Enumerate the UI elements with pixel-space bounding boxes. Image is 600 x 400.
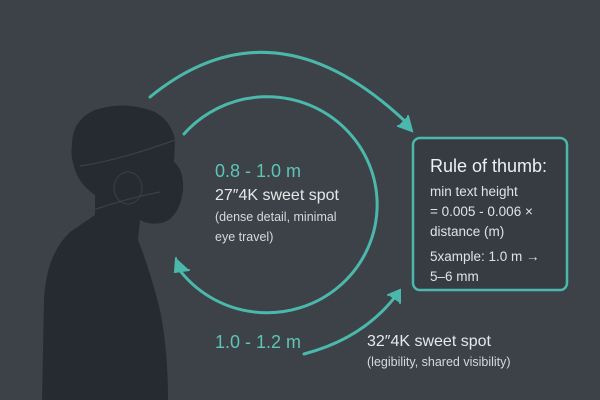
panel: rule of thumb: Rule of thumb: bbox=[430, 156, 547, 176]
panel: rule of thumb: 5xample: 1.0 m → bbox=[430, 249, 540, 264]
text: far range label: 1.0 - 1.2 m bbox=[215, 332, 301, 352]
text: 32 inch description: (legibility, shared visibility) bbox=[367, 355, 511, 369]
text: near range: eye travel) bbox=[215, 230, 273, 244]
panel: rule of thumb bbox=[413, 138, 567, 290]
arrow: outer arc bbox=[150, 52, 412, 131]
arrow: lower arc bbox=[304, 290, 400, 354]
panel: rule of thumb: min text height bbox=[430, 184, 518, 199]
text: near range bbox=[215, 161, 340, 244]
text: near range: 27″4K sweet spot bbox=[215, 187, 340, 204]
panel: rule of thumb: = 0.005 - 0.006 × bbox=[430, 204, 533, 219]
arrow: inner circle arc bbox=[175, 97, 377, 313]
panel: rule of thumb: distance (m) bbox=[430, 224, 504, 239]
text: near range: 0.8 - 1.0 m bbox=[215, 161, 301, 181]
text: 32 inch description bbox=[367, 333, 511, 369]
text: 32 inch description: 32″4K sweet spot bbox=[367, 333, 492, 350]
panel: rule of thumb: 5–6 mm bbox=[430, 269, 479, 284]
text: near range: (dense detail, minimal bbox=[215, 210, 337, 224]
silhouette: person with mask bbox=[42, 105, 183, 400]
